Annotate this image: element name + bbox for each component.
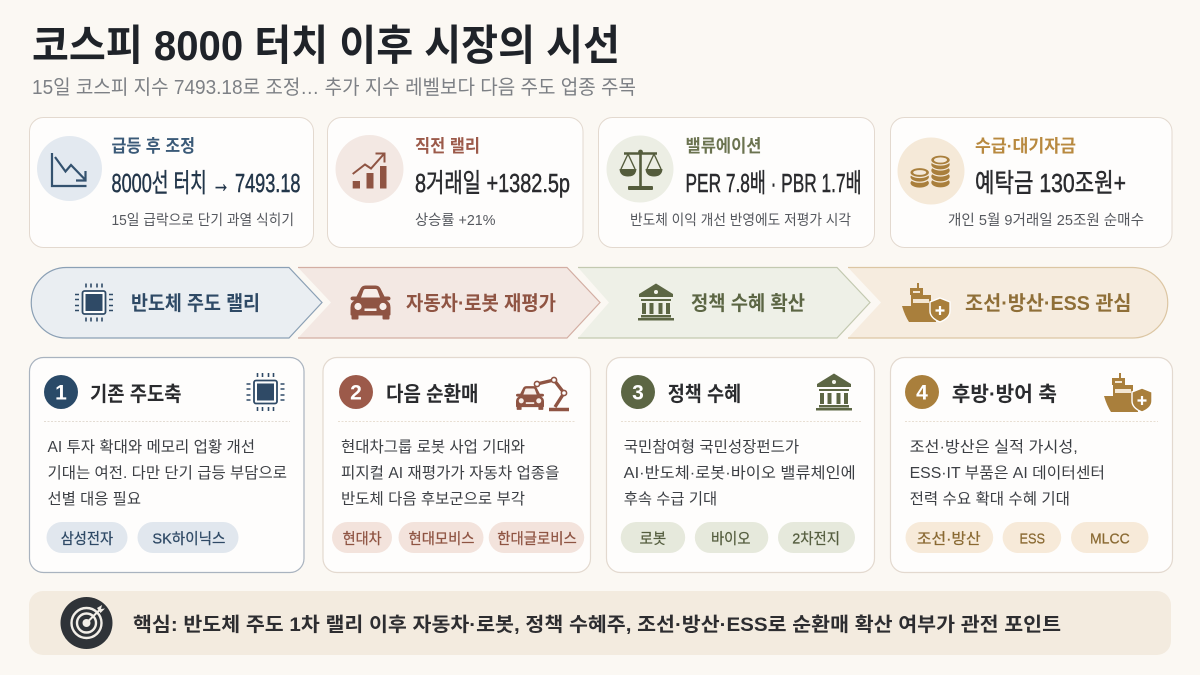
body text: 현대차그룹 로봇 사업 기대와 <box>341 438 525 456</box>
icon: scales <box>606 136 674 202</box>
icon: ship and shield <box>1104 373 1152 412</box>
panel: 밸류에이션 <box>598 118 874 248</box>
body text: 후속 수급 기대 <box>624 490 717 508</box>
icon: bank <box>816 374 852 410</box>
body text <box>48 438 287 508</box>
tags: MLCC <box>1090 530 1130 548</box>
title: 코스피 8000 터치 이후 시장의 시선 <box>32 22 620 69</box>
number badge 2 <box>339 375 373 409</box>
body text: AI·반도체·로봇·바이오 밸류체인에 <box>624 464 856 482</box>
tags: SK하이닉스 <box>152 530 226 548</box>
icon: bank <box>638 284 674 320</box>
icon: car <box>350 286 390 320</box>
tags: 2차전지 <box>792 530 840 548</box>
value: 8거래일 +1382.5p <box>415 168 570 198</box>
panel: 급등 후 조정 <box>30 118 314 248</box>
panel: 수급·대기자금 <box>890 118 1172 248</box>
subtitle: 15일 코스피 지수 7493.18로 조정… 추가 지수 레벨보다 다음 주도 업종 주목 <box>32 76 636 99</box>
note: 개인 5월 9거래일 25조원 순매수 <box>948 212 1144 229</box>
tags: 현대모비스 <box>408 530 475 548</box>
step 1 <box>31 268 322 338</box>
tags <box>906 522 1148 553</box>
tags <box>621 522 855 553</box>
number badge 1: 1 <box>55 382 67 404</box>
label: 밸류에이션 <box>686 136 762 156</box>
label: 정책 수혜 확산 <box>691 292 805 315</box>
icon: target <box>60 597 112 649</box>
body text <box>624 438 856 508</box>
card title: 기존 주도축 <box>90 383 182 406</box>
number badge 4: 4 <box>916 382 928 404</box>
label: 수급·대기자금 <box>975 136 1076 156</box>
icon: coins <box>898 138 964 204</box>
icon: chip <box>246 373 284 411</box>
number badge 3 <box>621 375 655 409</box>
number badge 4 <box>905 375 939 409</box>
tags: 로봇 <box>640 530 666 548</box>
card title: 정책 수혜 <box>668 383 741 406</box>
note: 반도체 이익 개선 반영에도 저평가 시각 <box>630 212 851 229</box>
value: 8000선 터치 → 7493.18 <box>112 168 300 198</box>
step 2 <box>298 268 600 338</box>
icon: falling chart <box>37 136 102 201</box>
body text: ESS·IT 부품은 AI 데이터센터 <box>910 464 1105 482</box>
tags: ESS <box>1020 530 1045 548</box>
number badge 1 <box>44 375 78 409</box>
panel: key takeaway <box>29 591 1171 655</box>
value: PER 7.8배 · PBR 1.7배 <box>686 168 862 198</box>
tags <box>46 522 238 553</box>
panel: 정책 수혜 <box>606 358 874 572</box>
body text <box>910 438 1105 508</box>
icon: rising chart <box>336 135 404 203</box>
label: 자동차·로봇 재평가 <box>406 292 556 315</box>
card title: 후방·방어 축 <box>952 383 1057 406</box>
panel: 직전 랠리 <box>328 118 583 248</box>
tags: 삼성전자 <box>61 530 113 548</box>
takeaway text: 핵심: 반도체 주도 1차 랠리 이후 자동차·로봇, 정책 수혜주, 조선·방산·ESS로 순환매 확산 여부가 관전 포인트 <box>133 614 1061 636</box>
body text: AI 투자 확대와 메모리 업황 개선 <box>48 438 255 456</box>
body text: 국민참여형 국민성장펀드가 <box>624 438 799 456</box>
step 4 <box>848 268 1168 338</box>
number badge 3: 3 <box>632 382 644 404</box>
body text: 기대는 여전. 다만 단기 급등 부담으로 <box>48 464 287 482</box>
body text: 조선·방산은 실적 가시성, <box>910 438 1078 456</box>
value: 예탁금 130조원+ <box>975 168 1126 198</box>
body text: 피지컬 AI 재평가가 자동차 업종을 <box>341 464 560 482</box>
card title: 다음 순환매 <box>386 383 478 406</box>
body text: 선별 대응 필요 <box>48 490 141 508</box>
panel: 다음 순환매 <box>323 358 590 572</box>
tags: 조선·방산 <box>917 530 981 548</box>
label: 반도체 주도 랠리 <box>131 292 260 315</box>
label: 조선·방산·ESS 관심 <box>965 292 1132 315</box>
tags: 현대차 <box>343 530 382 548</box>
note: 상승률 +21% <box>415 212 496 229</box>
number badge 2: 2 <box>350 382 362 404</box>
step 3 <box>578 268 870 338</box>
tags: 바이오 <box>711 530 751 548</box>
body text: 전력 수요 확대 수혜 기대 <box>910 490 1070 508</box>
flow: rotation chevrons <box>31 268 1168 338</box>
label: 급등 후 조정 <box>112 136 195 156</box>
label: 직전 랠리 <box>415 136 480 156</box>
icon: chip <box>75 284 113 322</box>
tags <box>332 522 584 553</box>
body text <box>341 438 560 508</box>
panel: 기존 주도축 <box>30 358 304 572</box>
panel: 후방·방어 축 <box>890 358 1172 572</box>
icon: ship and shield <box>902 283 950 322</box>
tags: 한대글로비스 <box>497 530 577 548</box>
icon: car and robot arm <box>516 377 569 410</box>
body text: 반도체 다음 후보군으로 부각 <box>341 490 525 508</box>
note: 15일 급락으로 단기 과열 식히기 <box>112 212 294 229</box>
